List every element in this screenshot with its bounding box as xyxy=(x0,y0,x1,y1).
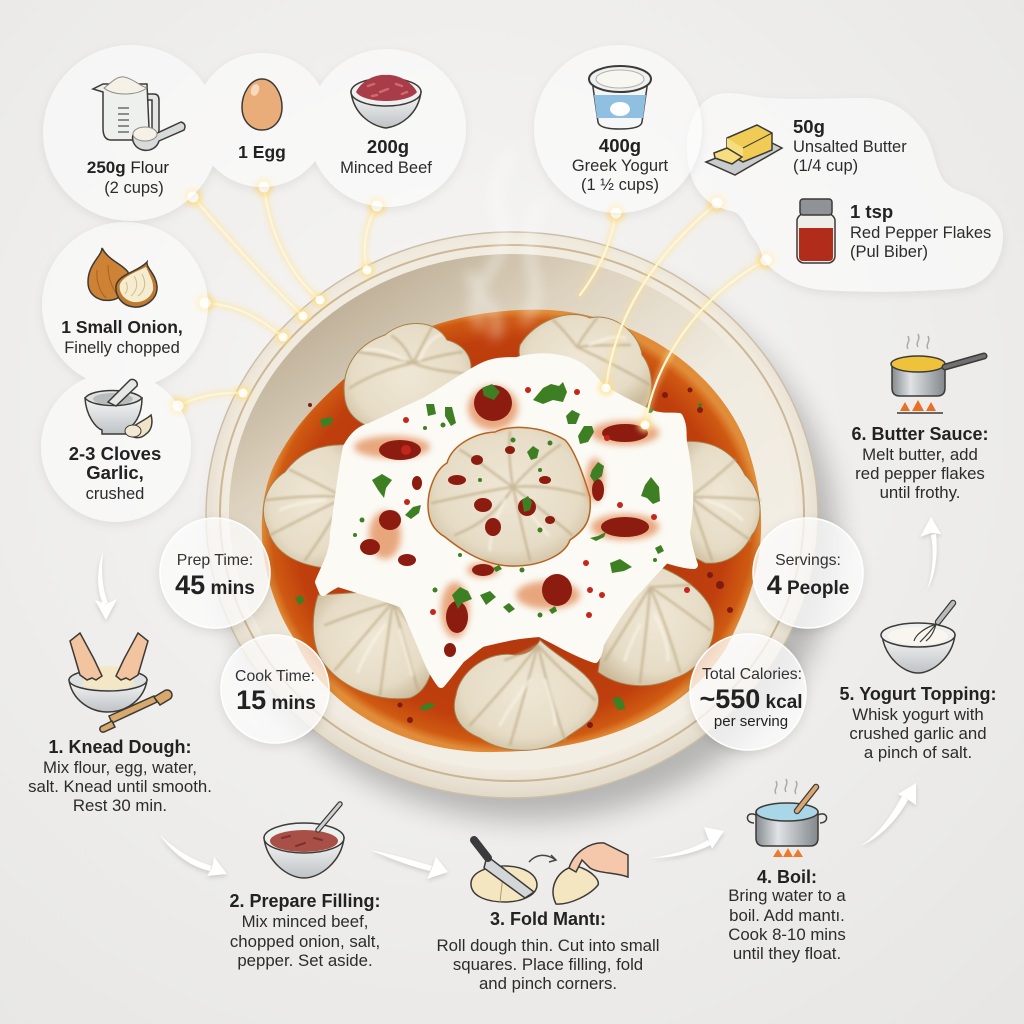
dumpling lower left xyxy=(313,590,433,699)
label: 1 Small Onion, xyxy=(61,317,183,337)
chili butter sauce xyxy=(308,385,733,728)
step 2: prepare filling: pepper. Set aside. xyxy=(237,951,373,970)
icon: bowl of beef xyxy=(351,75,421,128)
label: butter: 50g xyxy=(793,116,825,137)
step 4: boil: Bring water to a xyxy=(728,886,846,905)
icon: yogurt tub xyxy=(589,66,651,129)
label: pepper flakes: 1 tsp xyxy=(850,201,893,222)
icon: boiling pot xyxy=(747,779,827,857)
ingredients panel: butter and pepper flakes: Unsalted Butter xyxy=(793,138,907,156)
calories badge: per serving xyxy=(714,713,788,730)
ingredient bubbles: flour, egg, beef xyxy=(43,45,466,221)
calories badge: Total Calories: xyxy=(702,666,802,683)
step 4: boil xyxy=(728,779,846,963)
prep time badge: Prep Time: xyxy=(177,552,253,569)
label: 250g Flour xyxy=(87,158,169,177)
steam xyxy=(470,155,540,335)
ingredients panel: butter and pepper flakes: Red Pepper Flakes xyxy=(850,224,991,242)
dumpling left xyxy=(263,445,360,568)
label: 200g xyxy=(367,136,409,157)
prep time badge xyxy=(160,518,270,628)
step 5: yogurt topping: Whisk yogurt with xyxy=(852,705,984,724)
ingredients panel: butter and pepper flakes: (Pul Biber) xyxy=(850,243,928,261)
cook time badge: 15 mins xyxy=(236,685,316,715)
icon: whisk in bowl xyxy=(881,603,955,673)
yogurt topping xyxy=(319,357,694,684)
dumpling bottom xyxy=(454,640,599,750)
icon: bowl of filling xyxy=(264,804,344,878)
step 1: knead dough: Mix flour, egg, water, xyxy=(43,758,197,777)
step 1: knead dough xyxy=(28,633,212,815)
ingredient: minced beef xyxy=(340,75,432,177)
cook time badge xyxy=(221,635,329,743)
arrow: step 5 to 6 xyxy=(920,517,941,590)
icon: small arrow xyxy=(529,855,556,862)
dumpling top left xyxy=(344,324,471,440)
arrow: ingredients to step 1 xyxy=(95,551,117,620)
step 4: boil: Cook 8-10 mins xyxy=(728,925,846,944)
label: 2-3 Cloves xyxy=(69,443,161,464)
step 4: boil: boil. Add mantı. xyxy=(729,906,845,925)
step 3: fold manti: squares. Place filling, fold xyxy=(453,955,643,974)
ingredient: greek yogurt xyxy=(572,66,669,194)
glowing connector lines xyxy=(169,178,775,432)
ingredients panel: butter and pepper flakes xyxy=(706,116,991,263)
arrow: step 3 to 4 xyxy=(651,827,724,858)
prep time badge: 45 mins xyxy=(175,570,255,600)
step text: 4. Boil: xyxy=(757,867,817,887)
step 5: yogurt topping xyxy=(840,603,996,762)
arrow: step 1 to 2 xyxy=(160,835,227,876)
ingredient bubble: yogurt xyxy=(534,45,702,213)
servings badge xyxy=(753,518,863,628)
label: 400g xyxy=(599,135,641,156)
step 1: knead dough: Rest 30 min. xyxy=(73,796,167,815)
step 3: fold manti: and pinch corners. xyxy=(479,974,617,993)
calories badge: ~550 kcal xyxy=(699,684,803,714)
icon: hand folding dumpling xyxy=(553,843,628,904)
ingredient: onion xyxy=(61,248,183,357)
step 5: yogurt topping: a pinch of salt. xyxy=(864,743,972,762)
step 5: yogurt topping: crushed garlic and xyxy=(849,724,987,743)
dumpling centre xyxy=(428,427,590,566)
step text: 5. Yogurt Topping: xyxy=(840,684,996,704)
icon: kneading hands xyxy=(69,633,172,732)
step 2: prepare filling xyxy=(229,804,381,970)
step 2: prepare filling: chopped onion, salt, xyxy=(230,932,380,951)
step text: 2. Prepare Filling: xyxy=(229,891,381,911)
icon: saucepan on flame xyxy=(891,334,984,413)
ingredient bubbles: yogurt, butter and pepper panel xyxy=(687,93,1003,292)
icon: pepper flakes jar xyxy=(797,199,835,263)
step 6: butter sauce: red pepper flakes xyxy=(855,464,985,483)
icon: measuring cup and scoop xyxy=(93,77,185,150)
label: 1 Egg xyxy=(238,142,286,162)
bowl with mantı xyxy=(206,155,836,820)
step text: 3. Fold Mantı: xyxy=(490,909,606,929)
dumpling lower right xyxy=(598,565,714,686)
icon: butter on dish xyxy=(706,125,782,175)
ingredients panel: butter and pepper flakes: (1/4 cup) xyxy=(793,157,858,175)
ingredient: flour: (2 cups) xyxy=(104,179,164,197)
icon: egg xyxy=(242,79,282,130)
ingredient: greek yogurt: (1 ½ cups) xyxy=(581,176,659,194)
step 3: fold manti xyxy=(437,840,659,993)
ingredient: egg xyxy=(238,79,286,162)
arrow: step 2 to 3 xyxy=(370,850,448,879)
ingredient: garlic: crushed xyxy=(86,485,144,503)
step 6: butter sauce xyxy=(851,334,989,502)
step 6: butter sauce: until frothy. xyxy=(880,483,960,502)
parsley flecks xyxy=(295,382,702,711)
step 1: knead dough: salt. Knead until smooth. xyxy=(28,777,212,796)
icon: mortar and pestle xyxy=(85,379,152,438)
servings badge: Servings: xyxy=(775,552,841,569)
step text: 1. Knead Dough: xyxy=(48,737,192,757)
ingredient bubbles: onion and garlic xyxy=(41,222,208,522)
arrow: step 4 to 5 xyxy=(860,783,916,846)
dumpling top right xyxy=(519,314,651,408)
ingredient: garlic xyxy=(69,379,161,503)
ingredient: flour xyxy=(87,77,185,197)
icon: onions xyxy=(88,248,157,307)
step 2: prepare filling: Mix minced beef, xyxy=(242,912,368,931)
servings badge: 4 People xyxy=(767,570,849,600)
icon: knife and dough xyxy=(471,840,537,902)
calories badge xyxy=(690,634,806,750)
cook time badge: Cook Time: xyxy=(235,668,315,685)
step text: 6. Butter Sauce: xyxy=(851,424,989,444)
ingredient: onion: Finelly chopped xyxy=(64,339,180,357)
step 3: fold manti: Roll dough thin. Cut into small xyxy=(437,936,659,955)
ingredient: garlic: Garlic, xyxy=(86,462,144,483)
step 6: butter sauce: Melt butter, add xyxy=(862,445,978,464)
dumpling right xyxy=(680,441,760,563)
step 4: boil: until they float. xyxy=(733,944,841,963)
ingredient: greek yogurt: Greek Yogurt xyxy=(572,157,669,175)
sauce pool xyxy=(262,310,761,752)
ingredient: minced beef: Minced Beef xyxy=(340,159,432,177)
